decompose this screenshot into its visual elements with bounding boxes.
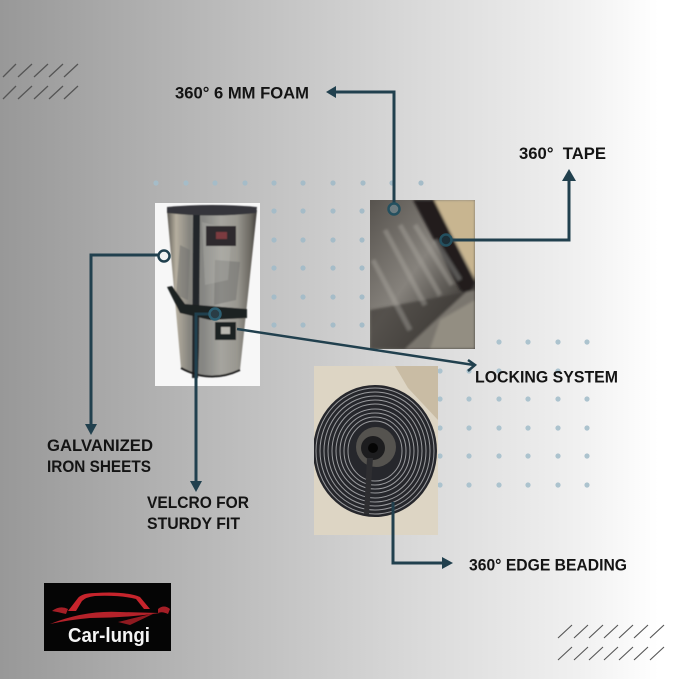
connector: velcro for sturdy fit	[190, 308, 220, 492]
label: velcro for sturdy fit: VELCRO FOR	[147, 493, 249, 512]
label: 360 tape: 360° TAPE	[519, 144, 606, 163]
connector: galvanized iron sheets	[85, 250, 170, 435]
label: 360 6 mm foam: 360° 6 MM FOAM	[175, 84, 309, 102]
label: locking system: LOCKING SYSTEM	[475, 368, 618, 386]
logo: car-lungi: Car-lungi	[68, 625, 150, 647]
dot grid: lower	[437, 339, 590, 488]
hatch pattern: top left	[3, 64, 78, 99]
connector: 360 tape	[440, 169, 576, 246]
connector: locking system	[237, 329, 475, 371]
connector: edge beading	[393, 502, 453, 569]
label: galvanized iron sheets: GALVANIZED	[47, 436, 153, 455]
logo: car-lungi	[44, 583, 171, 651]
label: velcro for sturdy fit: STURDY FIT	[147, 514, 241, 533]
connector: 360 6 mm foam	[326, 86, 400, 214]
label: velcro for sturdy fit	[147, 493, 249, 533]
hatch pattern: bottom right	[558, 625, 664, 660]
label: 360 edge beading: 360° EDGE BEADING	[469, 556, 627, 574]
photo: foam and tape close-up	[370, 200, 475, 349]
label: galvanized iron sheets: IRON SHEETS	[47, 457, 151, 476]
photo: edge beading coil	[313, 366, 438, 535]
photo: steel cylinder cover	[155, 203, 260, 386]
label: galvanized iron sheets	[47, 436, 153, 476]
dot grid: upper	[153, 180, 424, 328]
